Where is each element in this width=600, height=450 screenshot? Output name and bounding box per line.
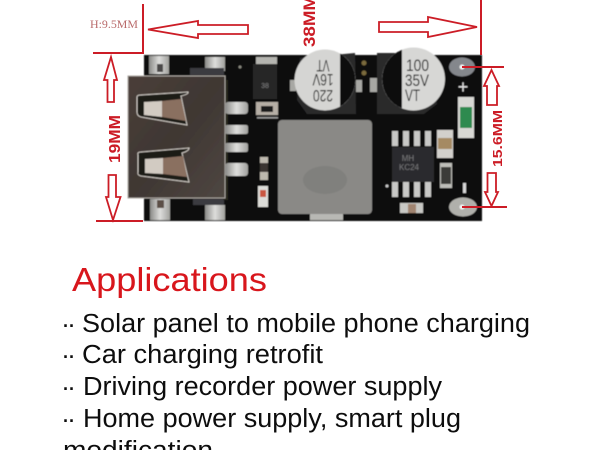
IC chip: MH [402,154,414,163]
19MM height dimension [96,57,143,221]
PCB board [144,55,482,221]
SMD resistor [440,163,452,188]
item: home power: Home power supply, smart plug [83,405,461,433]
item: solar panel: Solar panel to mobile phone charging [82,310,530,338]
38MM width dimension [300,0,481,55]
height callout: H:9.5MM [90,17,138,31]
right capacitor [377,48,445,114]
dimension annotations [90,0,507,221]
USB lower slot [138,148,189,182]
15.6MM pad spacing dimension [462,67,507,207]
left capacitor [294,50,356,114]
item: car charging: Car charging retrofit [82,341,323,369]
input pads [449,58,477,216]
small SMD parts [258,157,268,207]
USB pins [225,102,248,176]
item: car charging: ·· [63,347,75,367]
gold pads between capacitors [362,60,366,76]
USB solder tabs [149,56,225,220]
right capacitor: VT [405,87,420,105]
bottom SMD part [400,203,423,213]
left capacitor: 16V [312,70,334,88]
diode [253,57,278,118]
applications section [63,261,530,450]
item: home power: ·· [63,411,75,431]
fuse [458,97,474,138]
item: driving recorder: Driving recorder power supply [83,373,442,401]
right capacitor: 100 [406,57,429,75]
inductor [278,120,372,220]
left capacitor: 220 [313,86,333,104]
circuit board photo [128,48,482,221]
capacitor legs [290,78,378,92]
USB upper slot [137,92,188,125]
item: driving recorder: ·· [63,379,75,399]
19MM height dimension: 19MM [107,115,124,163]
application list [63,310,530,450]
diode: 38 [261,83,269,90]
item: solar panel: ·· [63,316,75,336]
15.6MM pad spacing dimension: 15.6MM [490,110,505,167]
applications heading: Applications [72,261,267,298]
minus marking [463,183,466,193]
USB bracket strips [190,68,228,205]
right capacitor: 35V [405,72,429,90]
plus marking: + [458,77,468,97]
USB port [128,76,225,198]
38MM width dimension: 38MM [300,0,319,47]
SMD capacitor [437,130,453,158]
IC chip: KC24 [399,163,420,172]
left capacitor: VT [316,56,330,74]
height callout [90,4,248,53]
board via dot [238,66,242,68]
IC chip [386,131,434,197]
